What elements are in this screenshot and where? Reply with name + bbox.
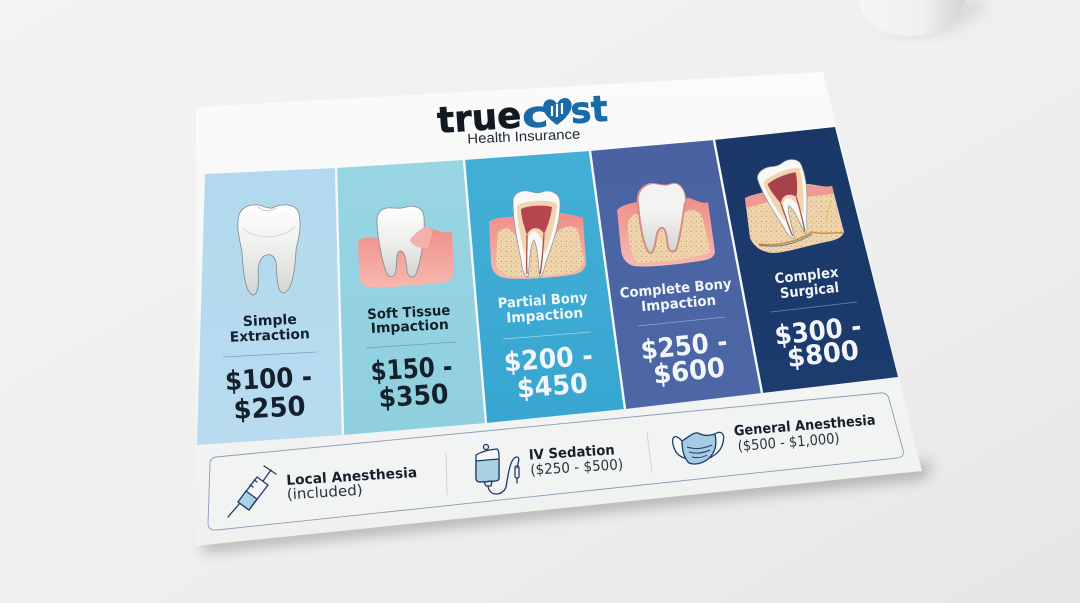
label: Complex xyxy=(774,265,839,287)
IV sedation text: IV Sedation xyxy=(528,442,615,464)
local anesthesia text: (included) xyxy=(286,483,363,503)
price: $250 xyxy=(233,391,306,426)
panel separators xyxy=(336,140,762,435)
general anesthesia text: General Anesthesia xyxy=(733,412,876,440)
price: $150 - xyxy=(370,352,453,387)
price xyxy=(773,311,863,374)
label xyxy=(230,312,310,346)
price: $300 - xyxy=(773,311,863,352)
logo tagline: Health Insurance xyxy=(467,126,581,146)
general anesthesia text: ($500 - $1,000) xyxy=(737,431,840,455)
icon: IV bag xyxy=(476,444,519,494)
IV sedation text xyxy=(528,442,624,479)
label: Impaction xyxy=(370,317,449,337)
price: $350 xyxy=(378,379,449,414)
price: $450 xyxy=(516,368,589,405)
icon: surgical mask xyxy=(673,432,724,464)
price xyxy=(503,341,594,405)
price: $800 xyxy=(786,335,861,374)
logo heart icon xyxy=(543,98,572,125)
price: $100 - xyxy=(224,362,313,397)
coffee mug xyxy=(858,0,985,36)
label: Complete Bony xyxy=(619,276,732,302)
price: $600 xyxy=(652,352,727,391)
logo letters st: st xyxy=(569,89,609,132)
card shadow xyxy=(200,462,932,552)
local anesthesia text: Local Anesthesia xyxy=(286,465,418,489)
label: Extraction xyxy=(230,326,310,346)
price xyxy=(639,327,729,391)
general anesthesia text xyxy=(733,412,876,455)
price xyxy=(224,362,313,426)
icon: healthy tooth xyxy=(238,205,300,295)
price xyxy=(370,352,453,414)
logo letter c: c xyxy=(521,94,550,137)
icon: tooth fully in bone xyxy=(617,184,715,267)
label xyxy=(774,265,840,302)
icon: tooth in gum xyxy=(358,206,454,287)
panel: complex surgical xyxy=(714,127,898,393)
card xyxy=(195,72,922,546)
price: $200 - xyxy=(503,341,594,378)
label: Impaction xyxy=(641,293,717,315)
label: Surgical xyxy=(779,280,840,302)
logo xyxy=(436,89,609,146)
label: Simple xyxy=(243,312,297,330)
label xyxy=(497,290,588,327)
icon: tilted tooth with nerve xyxy=(745,156,844,253)
label: Partial Bony xyxy=(497,290,588,312)
panel: partial bony impaction xyxy=(464,151,625,423)
panel: complete bony impaction xyxy=(590,140,762,409)
panel: soft tissue impaction xyxy=(336,160,486,435)
label xyxy=(619,276,732,315)
label: Soft Tissue xyxy=(367,303,451,323)
label xyxy=(367,303,451,337)
price: $250 - xyxy=(639,327,729,367)
icon: tooth cross-section partial bone xyxy=(489,191,586,279)
anesthesia options box xyxy=(208,393,903,530)
panel: simple extraction xyxy=(197,168,343,445)
label: Impaction xyxy=(506,305,584,327)
IV sedation text: ($250 - $500) xyxy=(530,457,624,479)
logo wordmark: true xyxy=(436,95,523,142)
icon: syringe xyxy=(228,466,276,517)
local anesthesia text xyxy=(286,465,418,503)
